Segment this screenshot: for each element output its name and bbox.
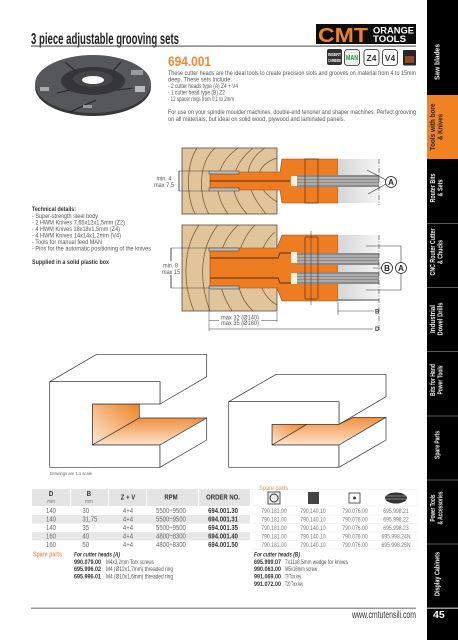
table: 694.001.40 xyxy=(208,533,238,541)
label: B A bottom xyxy=(382,262,406,274)
icons: insert carbide, MAN, Z4, V4, box: Z4 xyxy=(367,53,377,63)
diagram: bottom section xyxy=(171,225,401,330)
sidebar navigation: 45 xyxy=(433,609,445,621)
spare parts table: 790.076.00 xyxy=(342,526,368,532)
dimension: max 32 / max 35: max 35 (Ø160) xyxy=(221,320,259,327)
table: 50 xyxy=(82,542,89,549)
description: on all materials, but ideal on solid wood, plywood and laminated panels. xyxy=(168,116,345,123)
3D profile: narrow groove xyxy=(229,374,386,467)
description: - 1 cutter head type (B) Z2 xyxy=(168,90,225,96)
dimension: min 8 max 15 xyxy=(162,248,180,288)
title: 3 piece adjustable grooving sets xyxy=(31,31,179,48)
spare parts table: 790.140.10 xyxy=(300,517,326,524)
spare parts list A xyxy=(74,552,173,580)
product photo: cutter head xyxy=(35,55,151,116)
table: 4800÷8300 xyxy=(156,533,186,541)
dimension: D: D xyxy=(375,327,380,333)
logo: CMT Orange Tools: TOOLS xyxy=(373,34,406,45)
spare parts list A: For cutter heads (A) xyxy=(74,552,120,558)
icons: insert carbide, MAN, Z4, V4, box: CARBIDE xyxy=(328,58,341,63)
icons: insert carbide, MAN, Z4, V4, box: V4 xyxy=(385,53,395,63)
spare parts table: 695.998.25N xyxy=(381,543,411,549)
sidebar navigation: Dowel Drills xyxy=(436,302,444,336)
technical details xyxy=(32,206,151,266)
spare parts table: 790.181.00 xyxy=(261,509,287,515)
3D profile: wide groove xyxy=(50,354,207,467)
spare parts table: Spare parts xyxy=(259,485,289,492)
label: B A bottom: A xyxy=(398,264,404,273)
icons: insert carbide, MAN, Z4, V4, box: INSERT xyxy=(328,52,341,57)
table: 140 xyxy=(46,516,56,524)
table: mm xyxy=(85,499,93,505)
description: deep. These sets include: xyxy=(168,76,232,84)
spare parts table: 790.181.00 xyxy=(261,526,287,532)
spare parts list B: T20 Torx key xyxy=(285,581,303,588)
sidebar navigation: Spare Parts xyxy=(432,431,442,459)
spare parts list B: M5x16mm screw xyxy=(285,566,317,573)
table: 140 xyxy=(46,508,56,515)
table: RPM xyxy=(164,494,178,502)
spare parts list A: 695.996.01 xyxy=(74,574,101,580)
icons: insert carbide, MAN, Z4, V4, box xyxy=(327,49,416,66)
spare parts list B: 695.999.07 xyxy=(254,559,281,566)
spare parts table: 790.140.10 xyxy=(300,534,326,541)
sidebar navigation: Power Tools xyxy=(428,494,437,522)
spare parts table: 695.998.23 xyxy=(383,526,409,532)
table: 4800÷8300 xyxy=(156,542,186,549)
sidebar navigation: CNC Router Cutter xyxy=(428,228,437,276)
logo: CMT Orange Tools: ORANGE xyxy=(373,26,414,36)
table: D xyxy=(49,491,53,498)
spare parts table: 695.998.22 xyxy=(383,517,409,524)
sidebar navigation: Display Cabinets xyxy=(432,552,442,596)
spare parts list B: 7x11x8,5mm wedge for knives xyxy=(285,559,348,566)
spare parts heading: Spare parts xyxy=(33,552,62,558)
table: B xyxy=(87,491,91,498)
table: 40 xyxy=(82,533,89,541)
table: 35 xyxy=(82,525,89,532)
spare parts table: 790.140.10 xyxy=(300,509,326,515)
spare parts table: 790.140.10 xyxy=(300,543,326,549)
spare parts list A: 990.079.00 xyxy=(74,559,101,566)
spare parts table: 790.181.00 xyxy=(261,543,287,549)
dimension: min 4 max 7,5: max 7,5 xyxy=(154,182,174,189)
table: mm xyxy=(47,499,55,505)
logo: CMT Orange Tools xyxy=(316,24,416,47)
sidebar navigation xyxy=(427,0,458,640)
sidebar navigation: Tools with bore xyxy=(428,104,437,150)
spare parts table: 790.076.00 xyxy=(342,517,368,524)
table xyxy=(32,489,250,549)
spare parts table: 790.140.10 xyxy=(300,526,326,532)
spare parts table: 790.076.00 xyxy=(342,543,368,549)
sidebar navigation: Saw blades xyxy=(432,44,442,80)
technical details: - Pins for the automatic positioning of the knives xyxy=(32,246,151,252)
description: - 2 cutter heads type (A) Z4 + V4 xyxy=(168,83,238,90)
technical details: - Super-strength steel body xyxy=(32,213,99,220)
description: These cutter heads are the ideal tools to create precision slots and grooves on material from 4 to 15mm xyxy=(168,70,416,77)
dimension: min 4 max 7,5: min. 4 xyxy=(156,176,172,182)
dimension: B xyxy=(338,302,380,316)
spare parts list B: For cutter heads (B) xyxy=(254,552,300,558)
table: 694.001.50 xyxy=(208,542,238,549)
table: 160 xyxy=(46,533,56,541)
technical details: Supplied in a solid plastic box xyxy=(32,259,109,266)
spare parts table: 790.181.00 xyxy=(261,517,287,524)
spare parts table: 790.076.00 xyxy=(342,534,368,541)
spare parts list A: M4x3,2mm Torx screws xyxy=(106,559,154,566)
label: B A bottom: B xyxy=(384,264,390,273)
spare parts table xyxy=(252,485,417,549)
sidebar navigation: Router Bits xyxy=(428,173,437,203)
technical details: Technical details: xyxy=(32,206,76,213)
sidebar navigation: & Knives xyxy=(436,114,444,140)
table: 4+4 xyxy=(123,525,133,532)
description: - 12 spacer rings from 0,1 to 2mm xyxy=(168,96,234,103)
table: 5500÷9500 xyxy=(156,516,186,524)
table: 5500÷9500 xyxy=(156,508,186,515)
spare parts list A: M4 (Ø10x1,6mm) threaded ring xyxy=(106,574,173,580)
product code: 694.001 xyxy=(168,53,211,69)
dimension: min 8 max 15: min. 8 xyxy=(163,262,178,270)
sidebar navigation: Bits for Hand xyxy=(428,364,437,396)
table: 694.001.31 xyxy=(208,516,238,524)
spare parts table: 790.181.00 xyxy=(261,534,287,541)
sidebar navigation: Industrial xyxy=(428,305,437,333)
dimension: max 32 / max 35 xyxy=(209,290,277,331)
spare parts list B: 991.069.00 xyxy=(254,574,281,580)
dimension: B: B xyxy=(375,310,380,316)
dimension: max 32 / max 35: max 32 (Ø140) xyxy=(221,314,259,321)
icons: insert carbide, MAN, Z4, V4, box: MAN xyxy=(346,55,358,62)
spare parts list A: M4 (Ø12x1,7mm) threaded ring xyxy=(106,566,173,573)
spare parts list B xyxy=(254,552,348,588)
technical details: - 4 HWM Knives 14x14x1,2mm (V4) xyxy=(32,232,121,240)
table: Z + V xyxy=(121,494,136,502)
table: 694.001.30 xyxy=(208,508,238,515)
label: A top: A xyxy=(388,178,394,187)
table: 4+4 xyxy=(123,516,133,524)
sidebar navigation: & Sets xyxy=(436,180,444,196)
sidebar navigation: & Accessories xyxy=(436,492,444,524)
table: ORDER NO. xyxy=(206,494,240,502)
logo: CMT Orange Tools: CMT xyxy=(318,25,368,47)
diagram: top section xyxy=(179,148,386,214)
spare parts table: 695.998.21 xyxy=(383,509,409,515)
spare parts table: 695.998.24N xyxy=(381,534,411,541)
spare parts list B: 991.072.00 xyxy=(254,581,281,588)
dimension: min 4 max 7,5 xyxy=(154,171,179,191)
table: 4+4 xyxy=(123,533,133,541)
table: 31,75 xyxy=(82,516,98,524)
spare parts list B: T9 Torx key xyxy=(285,574,301,580)
table: 140 xyxy=(46,525,56,532)
technical details: - 4 HWM Knives 18x18x1,5mm (Z4) xyxy=(32,226,120,233)
scale note: Drawings are 1:1 scale xyxy=(50,471,92,476)
sidebar navigation: Power Tools xyxy=(436,366,444,394)
footer rule and website: www.cmtutensili.com xyxy=(351,610,416,621)
technical details: - Tools for manual feed MAN xyxy=(32,239,102,246)
spare parts list A: 695.996.02 xyxy=(74,566,101,573)
technical details: - 2 HWM Knives 7,65x12x1,5mm (Z2) xyxy=(32,220,125,226)
table: 5500÷9500 xyxy=(156,525,186,532)
table: 160 xyxy=(46,542,56,549)
dimension: min 8 max 15: max 15 xyxy=(162,269,180,276)
spare parts table: 790.076.00 xyxy=(342,509,368,515)
description xyxy=(168,70,416,123)
table: 30 xyxy=(82,508,89,515)
table: 694.001.35 xyxy=(208,525,238,532)
spare parts list B: 990.063.00 xyxy=(254,566,281,573)
label: A top xyxy=(386,176,396,188)
table: 4+4 xyxy=(123,542,133,549)
table: 4+4 xyxy=(123,508,133,515)
sidebar navigation: & Chucks xyxy=(436,240,444,264)
description: For use on your spindle moulder machines, double-end tenoner and shaper machines. Perfect grooving xyxy=(168,109,416,116)
